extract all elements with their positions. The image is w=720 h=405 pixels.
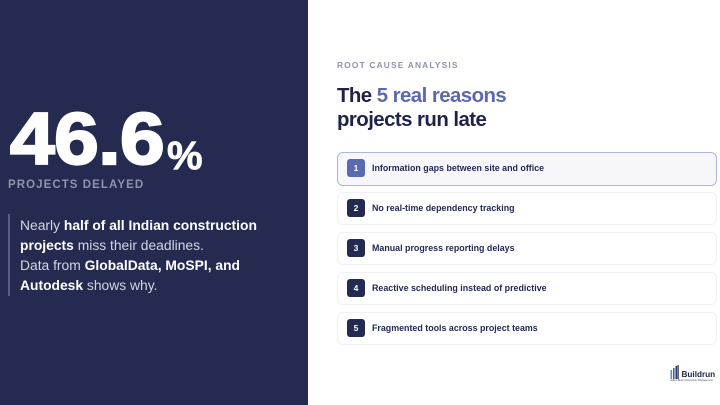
big statistic: 46.6%: %	[167, 134, 203, 178]
label 4: Reactive scheduling instead of predictive	[372, 283, 547, 293]
text block: description with left rule: projects miss their deadlines.	[20, 237, 204, 253]
icon: logo bars	[670, 365, 679, 379]
wordmark: Buildrun	[682, 370, 715, 378]
number badge 4: 4	[354, 283, 358, 293]
number badge 3	[347, 239, 365, 257]
label 5: Fragmented tools across project teams	[372, 323, 538, 333]
heading: The 5 real reasons	[337, 85, 506, 107]
number badge 1	[347, 159, 365, 177]
number badge 2	[347, 199, 365, 217]
heading	[337, 85, 506, 131]
label 2: No real-time dependency tracking	[372, 203, 515, 213]
text block: description with left rule	[8, 214, 278, 296]
number badge 2: 2	[354, 203, 358, 213]
list item 1: highlighted	[337, 152, 717, 186]
panel: left statistic panel	[0, 0, 308, 405]
list item 4	[337, 272, 717, 305]
tagline: India's Best Construction Management	[670, 378, 713, 382]
list item 5	[337, 312, 717, 345]
text block: description with left rule: Autodesk shows why.	[20, 277, 157, 293]
label 1: Information gaps between site and office	[372, 163, 544, 173]
number badge 5: 5	[354, 323, 358, 333]
number badge 1: 1	[354, 163, 358, 173]
list item 2	[337, 192, 717, 225]
list item 3	[337, 232, 717, 265]
number badge 5	[347, 319, 365, 337]
heading: projects run late	[337, 109, 486, 131]
text block: description with left rule: Data from GlobalData, MoSPI, and	[20, 257, 240, 273]
label 3: Manual progress reporting delays	[372, 243, 515, 253]
number badge 4	[347, 279, 365, 297]
logo: Buildrun	[670, 365, 715, 382]
big statistic: 46.6%: 46.6	[10, 99, 164, 180]
label: projects delayed: PROJECTS DELAYED	[8, 178, 144, 190]
eyebrow: root cause analysis: ROOT CAUSE ANALYSIS	[337, 60, 459, 70]
text block: description with left rule: Nearly half of all Indian construction	[20, 216, 257, 232]
number badge 3: 3	[354, 243, 358, 253]
